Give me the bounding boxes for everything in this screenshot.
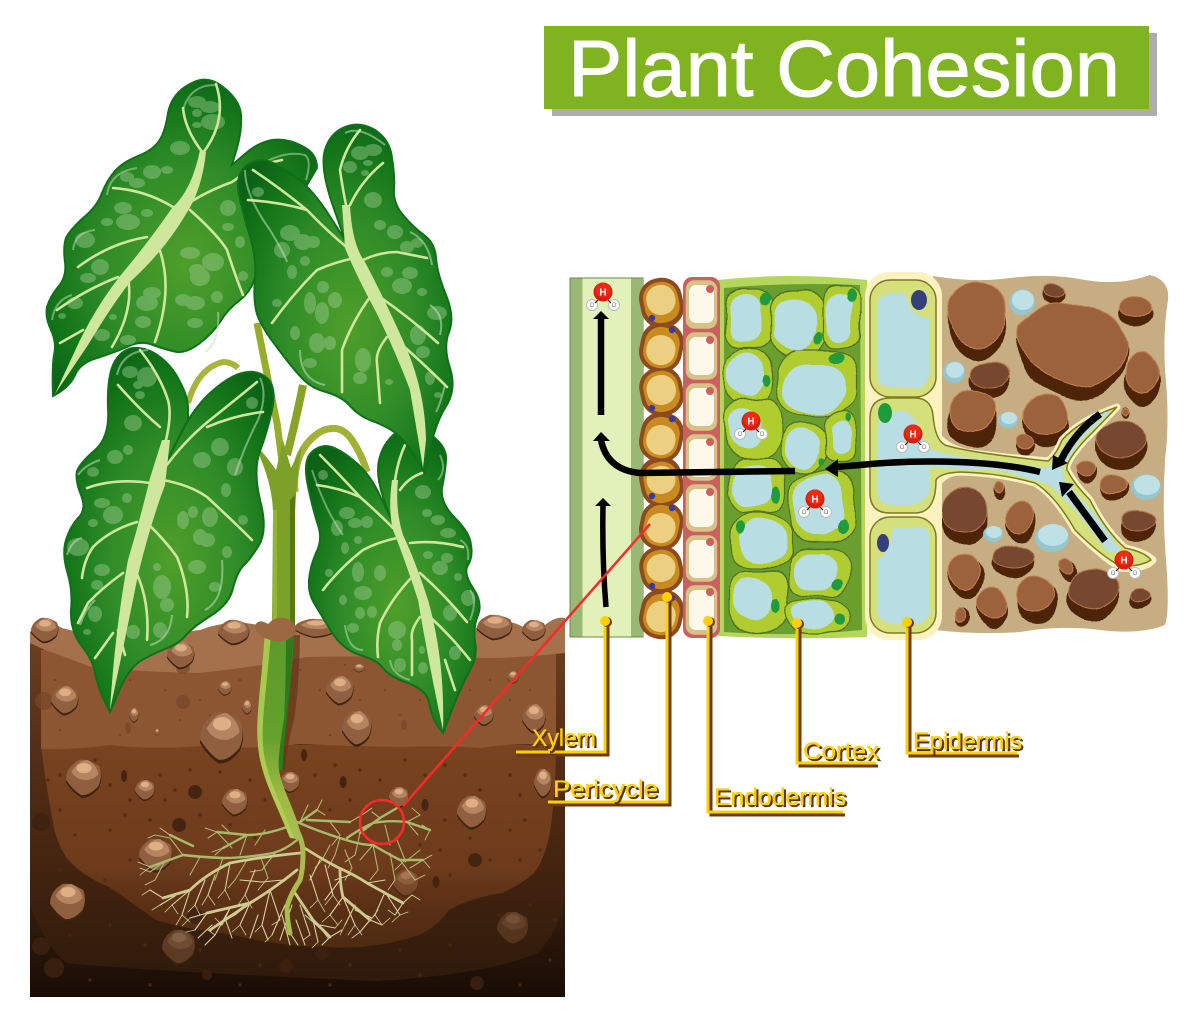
molecule: epidermis: O <box>900 445 905 451</box>
molecule: epidermis <box>896 424 930 452</box>
soil clods <box>32 749 484 990</box>
molecule: xylem <box>586 282 620 310</box>
leaf: lower left <box>64 348 274 712</box>
petiole: side <box>287 385 303 455</box>
leaf veins <box>317 445 470 730</box>
panel: endodermis <box>683 277 720 638</box>
pericycle nuclei <box>649 315 675 601</box>
water drops <box>943 289 1161 552</box>
molecule: xylem: O <box>590 303 595 309</box>
endodermis nuclei <box>706 285 714 596</box>
label: Pericycle: Pericycle <box>553 776 658 803</box>
molecule: root hair <box>1108 550 1140 578</box>
molecule: cortex upper: O <box>738 432 743 438</box>
cortex vacuoles <box>728 293 852 627</box>
taproot <box>287 827 303 933</box>
arrows <box>593 311 1105 607</box>
main lateral roots <box>150 808 430 867</box>
leaf highlights <box>67 350 264 645</box>
molecule: cortex upper <box>734 412 768 440</box>
leaf spots <box>318 470 475 674</box>
molecule: cortex upper: O <box>760 432 765 438</box>
molecule: cortex lower: H <box>811 494 819 506</box>
roots <box>138 800 432 948</box>
molecule: root hair: O <box>1133 571 1138 577</box>
title text: Plant Cohesion <box>568 24 1120 113</box>
leaf: top right <box>238 125 453 473</box>
label: Xylem: Xylem <box>532 725 596 752</box>
rocks <box>31 615 552 966</box>
leaf spots <box>67 366 258 639</box>
molecule: root hair: O <box>1111 571 1116 577</box>
epidermis nuclei <box>911 290 927 310</box>
molecule: epidermis: H <box>909 430 917 440</box>
label: Cortex <box>792 618 879 766</box>
arrow: lower root hair branch <box>1059 482 1105 541</box>
label: Epidermis <box>902 617 1022 756</box>
arrow: horizontal into xylem <box>593 432 795 473</box>
epidermis nucleus lower <box>877 534 889 552</box>
label: Cortex: Cortex <box>803 738 879 765</box>
panel: xylem <box>570 278 643 637</box>
leaf highlights <box>312 455 474 680</box>
leaf spots <box>58 96 248 345</box>
panel: soil with rocks <box>933 275 1168 633</box>
label: Epidermis: Epidermis <box>913 728 1022 755</box>
leaf veins <box>248 130 447 468</box>
leaf: lower right <box>306 430 480 733</box>
arrow: xylem upper <box>593 311 609 415</box>
magnifier line and circle <box>360 524 650 844</box>
label: Endodermis <box>703 616 846 815</box>
panel: cortex <box>718 276 867 638</box>
petiole: curved right <box>295 428 367 492</box>
cortex chloroplasts <box>735 288 856 625</box>
molecule: cortex lower: O <box>824 510 829 516</box>
molecule: cortex lower: O <box>802 510 807 516</box>
label: Xylem <box>516 616 612 755</box>
soil cross-section <box>30 615 565 997</box>
molecule: epidermis: O <box>922 445 927 451</box>
fine root twigs <box>150 860 412 945</box>
molecule: root hair: H <box>1120 556 1128 566</box>
title banner <box>544 24 1157 116</box>
molecule: xylem: H <box>599 288 607 298</box>
leaf veins <box>55 84 282 394</box>
water molecules <box>586 282 1140 578</box>
leaf highlights <box>245 131 445 412</box>
molecule: xylem: O <box>612 303 617 309</box>
cortex cells <box>725 285 860 632</box>
leaf highlights <box>52 85 309 352</box>
petiole: top <box>257 323 283 470</box>
label: Pericycle <box>548 592 674 805</box>
molecule: cortex upper: H <box>747 416 755 428</box>
stem <box>188 323 367 840</box>
epidermis chloroplast <box>878 403 892 423</box>
upper stem <box>256 440 302 630</box>
soil rocks <box>942 282 1161 630</box>
epidermis vacuoles <box>877 293 1122 625</box>
leaf veins <box>78 350 263 710</box>
label: Endodermis: Endodermis <box>714 784 846 811</box>
arrow: across epidermis <box>825 459 1040 477</box>
molecule: cortex lower <box>798 490 832 518</box>
panel: epidermis with root hair <box>865 272 1153 640</box>
panel: pericycle <box>635 274 688 643</box>
epidermis cells <box>870 280 1151 633</box>
leaf spots <box>252 144 447 398</box>
arrow: upper root hair branch <box>1052 414 1100 470</box>
leaf: top left <box>46 80 317 396</box>
soil specks <box>48 760 555 985</box>
arrow: xylem lower <box>595 498 611 607</box>
petiole: curved left <box>188 362 238 403</box>
